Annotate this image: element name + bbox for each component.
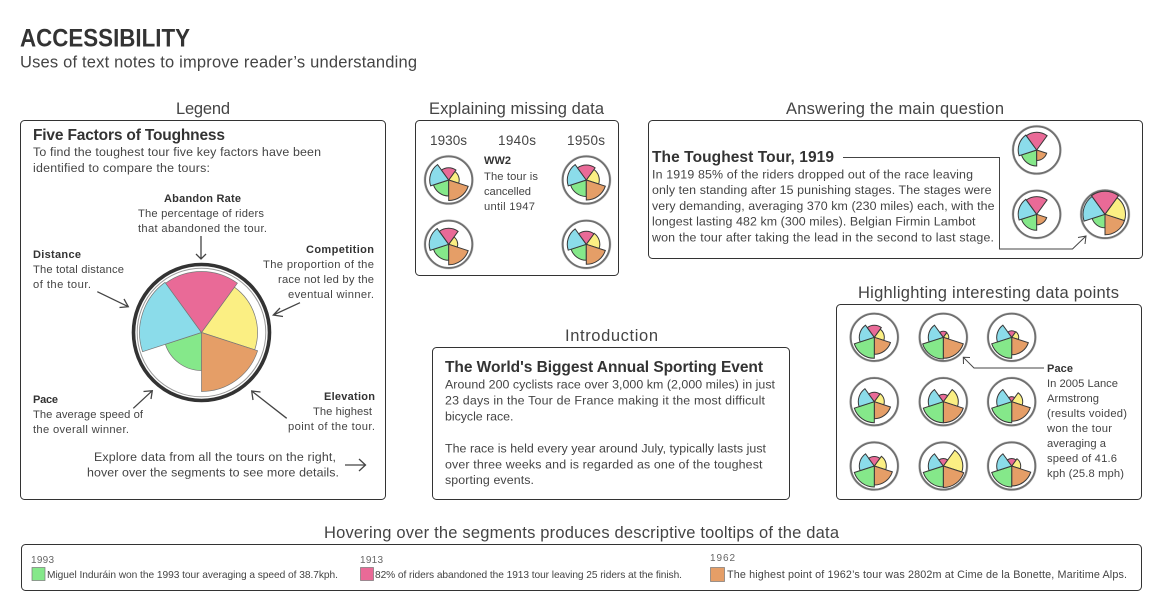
tooltip 1962: 1962 — [710, 553, 735, 564]
panel: introduction — [432, 348, 790, 500]
chart 1930s b — [424, 220, 473, 269]
chart 1950s b — [562, 220, 611, 269]
label: abandon rate — [138, 193, 267, 235]
heading: missing data: Explaining missing data — [429, 100, 605, 118]
label: elevation: Elevation — [324, 391, 375, 403]
heading: introduction: Introduction — [565, 327, 658, 345]
arrow: explore — [345, 459, 366, 471]
label: competition: The proportion of the — [263, 259, 374, 271]
note: pace — [1046, 363, 1127, 480]
note: pace: Pace — [1047, 363, 1073, 375]
label: pace — [33, 394, 144, 436]
label: pace: the overall winner. — [33, 424, 129, 436]
explore note — [87, 450, 339, 480]
chart grid — [850, 313, 1036, 491]
label: distance: Distance — [33, 249, 81, 261]
panel: tooltips — [22, 544, 1142, 590]
tooltip 1913: 1913 — [360, 555, 383, 566]
decade labels: 1950s — [567, 133, 605, 148]
tooltip 1913: 82% of riders abandoned the 1913 tour leaving 25 riders at the finish. — [375, 570, 682, 581]
introduction text: 23 days in the Tour de France making it the most difficult — [445, 393, 766, 407]
toughest tour text — [651, 168, 995, 244]
arrow: competition — [273, 303, 300, 316]
note: pace: averaging a — [1047, 438, 1107, 450]
label: distance: The total distance — [33, 264, 124, 276]
introduction text: bicycle race. — [445, 410, 514, 424]
note: pace: kph (25.8 mph) — [1047, 468, 1124, 480]
heading: legend: Legend — [176, 100, 230, 118]
label: competition — [263, 244, 374, 301]
label: abandon rate: Abandon Rate — [164, 193, 241, 205]
decade labels: 1940s — [498, 133, 536, 148]
label: distance: of the tour. — [33, 279, 91, 291]
label: elevation: The highest — [313, 406, 373, 418]
heading: tooltips: Hovering over the segments produces descriptive tooltips of the data — [324, 524, 840, 542]
tooltip 1993 — [31, 555, 338, 581]
toughest tour text: In 1919 85% of the riders dropped out of the race leaving — [652, 168, 973, 182]
note: pace: Armstrong — [1047, 393, 1099, 405]
legend intro text: identified to compare the tours: — [33, 161, 210, 175]
chart 1950s a — [562, 155, 611, 205]
panel: missing data — [416, 120, 618, 276]
note: ww2: until 1947 — [484, 201, 535, 213]
heading: highlights: Highlighting interesting data points — [858, 284, 1119, 302]
legend title: Five Factors of Toughness — [33, 127, 225, 144]
note: ww2 — [484, 155, 538, 213]
introduction title: The World's Biggest Annual Sporting Event — [445, 359, 763, 376]
note: pace: speed of 41.6 — [1047, 453, 1117, 465]
legend intro text: To find the toughest tour five key factors have been — [33, 145, 321, 159]
chart 1919 comparison a — [1012, 125, 1061, 175]
annotated rose chart — [134, 264, 270, 400]
tooltip 1962: The highest point of 1962’s tour was 2802m at Cime de la Bonette, Maritime Alps. — [727, 569, 1127, 581]
label: competition: race not led by the — [278, 274, 374, 286]
label: elevation — [288, 391, 375, 433]
tooltip 1993: Miguel Induráin won the 1993 tour averaging a speed of 38.7kph. — [47, 570, 338, 581]
toughest tour text: won the tour after taking the lead in the second to last stage. — [651, 230, 994, 244]
note: ww2: The tour is — [484, 171, 538, 183]
subtitle: Uses of text notes to improve reader’s understanding — [20, 54, 417, 72]
panel: main question — [648, 120, 1142, 258]
heading: main question: Answering the main question — [786, 100, 1004, 118]
label: abandon rate: that abandoned the tour. — [138, 223, 267, 235]
introduction text: over three weeks and is regarded as one of the toughest — [445, 458, 763, 472]
arrow: elevation — [252, 391, 287, 418]
arrow: abandon rate — [196, 236, 206, 259]
toughest tour text: longest lasting 482 km (300 miles). Belgian Firmin Lambot — [652, 214, 976, 228]
toughest tour title: The Toughest Tour, 1919 — [652, 149, 834, 166]
connector arrow — [843, 158, 1086, 249]
label: elevation: point of the tour. — [288, 421, 375, 433]
note: ww2: WW2 — [484, 155, 511, 167]
tooltip 1913 — [360, 555, 682, 581]
panel: legend — [20, 120, 386, 500]
introduction text: The race is held every year around July, typically lasts just — [445, 441, 767, 455]
toughest tour text: very demanding, averaging 370 km (230 miles) each, with the — [652, 199, 995, 213]
decade labels — [430, 133, 605, 148]
introduction text: Around 200 cyclists race over 3,000 km (2,000 miles) in just — [445, 378, 776, 392]
decade labels: 1930s — [430, 133, 467, 148]
chart 1930s a — [424, 155, 473, 205]
label: distance — [33, 249, 124, 291]
note: pace: won the tour — [1046, 423, 1112, 435]
legend intro text — [33, 145, 321, 175]
title: ACCESSIBILITY — [20, 24, 190, 52]
label: pace: The average speed of — [33, 409, 144, 421]
connector arrow: pace — [963, 357, 1044, 368]
introduction text: sporting events. — [445, 473, 534, 487]
label: abandon rate: The percentage of riders — [138, 208, 264, 220]
note: pace: In 2005 Lance — [1047, 378, 1118, 390]
chart 1919 comparison b — [1012, 190, 1061, 239]
introduction text — [445, 378, 776, 487]
note: pace: (results voided) — [1047, 408, 1127, 420]
note: ww2: cancelled — [484, 186, 531, 198]
label: competition: Competition — [306, 244, 374, 256]
toughest tour text: only ten standing after 15 punishing stages. The stages were — [652, 183, 992, 197]
arrow: distance — [97, 292, 128, 308]
tooltip 1962 — [710, 553, 1127, 582]
explore note: hover over the segments to see more details. — [87, 466, 339, 480]
tooltip 1993: 1993 — [31, 555, 54, 566]
label: pace: Pace — [33, 394, 58, 406]
label: competition: eventual winner. — [288, 289, 374, 301]
explore note: Explore data from all the tours on the right, — [94, 450, 336, 464]
panel: highlights — [836, 304, 1142, 500]
arrow: pace — [133, 391, 152, 408]
chart 1919 — [1080, 190, 1130, 239]
